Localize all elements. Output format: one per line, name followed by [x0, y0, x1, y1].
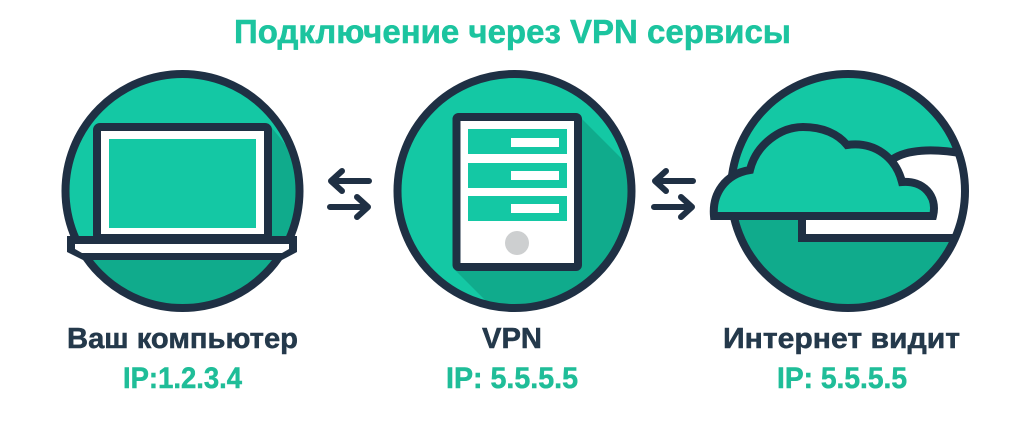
ip: VPN: IP: 5.5.5.5 — [446, 362, 578, 395]
ip: computer: IP:1.2.3.4 — [123, 362, 242, 395]
front cloud — [714, 127, 934, 216]
lower shadow — [739, 220, 949, 304]
server button — [505, 231, 529, 255]
icon: laptop in circle — [62, 70, 304, 312]
server row 2 — [468, 163, 567, 188]
laptop shadow — [93, 123, 296, 304]
label: your computer — [67, 323, 298, 395]
server body — [456, 117, 578, 267]
label: internet sees: Интернет видит — [723, 323, 960, 355]
laptop screen — [97, 127, 268, 238]
back cloud — [806, 154, 961, 234]
label: VPN — [446, 323, 578, 395]
label: your computer: Ваш компьютер — [67, 323, 298, 355]
arrows: VPN to internet — [654, 171, 693, 217]
title: Подключение через VPN сервисы — [234, 13, 791, 50]
icon: VPN server in circle — [398, 74, 650, 330]
ip: internet: IP: 5.5.5.5 — [777, 362, 907, 395]
server row 3 — [468, 196, 567, 221]
label: VPN: VPN — [482, 323, 542, 355]
icon: cloud in circle — [714, 74, 980, 316]
server shadow — [455, 119, 628, 304]
server row 1 — [468, 129, 567, 154]
label: internet sees — [723, 323, 960, 395]
laptop base — [67, 236, 297, 260]
arrows: computer to VPN — [330, 171, 369, 217]
